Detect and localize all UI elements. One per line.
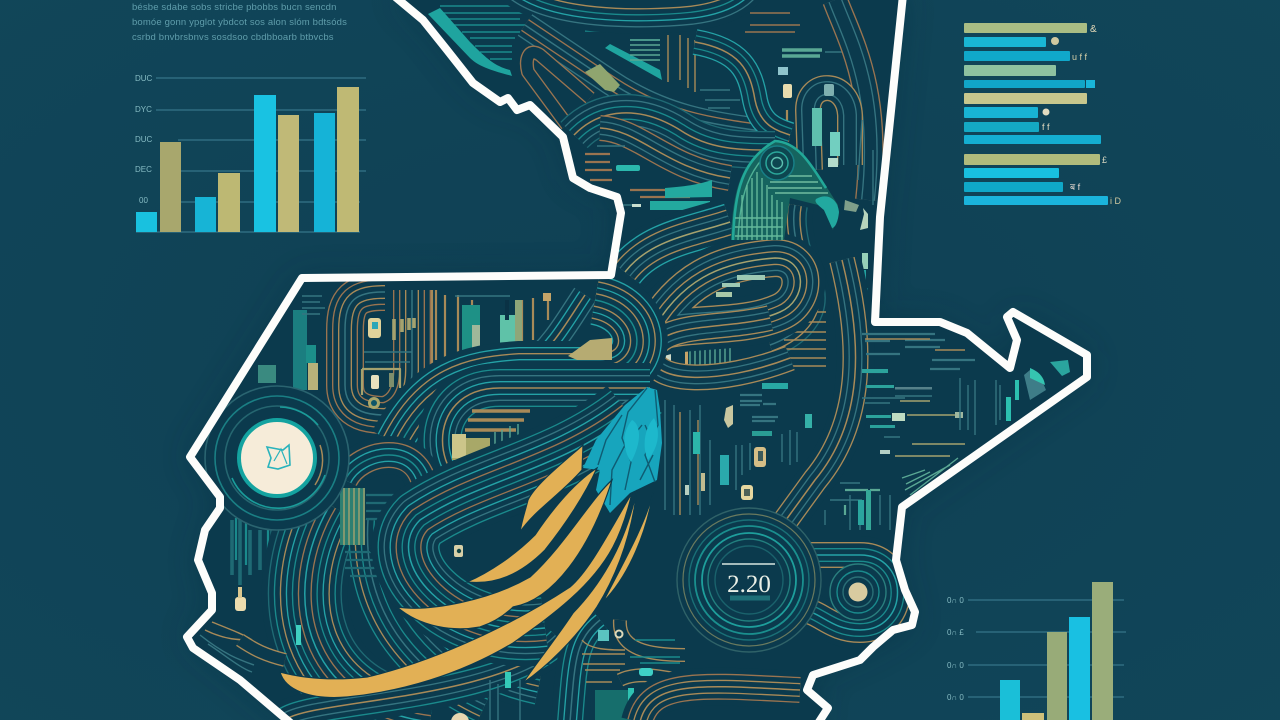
line bundle: hook: [345, 455, 426, 565]
hatch: upper centre rectangles and verticals: [668, 13, 842, 125]
line bundle: lower wave: [600, 128, 730, 178]
bar chart: top right horizontal: f f: [1042, 122, 1050, 132]
medallion: 220 dial: [677, 508, 821, 652]
line bundle: lower swirl: [296, 586, 541, 704]
bar chart: top left: DUC: [135, 74, 153, 83]
bottom beige disc: [451, 713, 469, 720]
line bundle: diagonal cyan: [536, 288, 594, 341]
bar chart: top right horizontal: £: [1102, 155, 1107, 165]
bar chart: top left: [135, 74, 366, 232]
line bundle: left sweep: [305, 505, 430, 720]
map outline: [187, 0, 1087, 720]
hatch: centre right verticals: [665, 383, 812, 515]
line bundle: U loop: [345, 290, 412, 415]
bar chart: top right horizontal: i D: [1110, 196, 1122, 206]
line bundle: bottom right curves: [640, 687, 800, 720]
bar chart: top right horizontal: &: [1090, 24, 1097, 35]
hatch: left vertical teal: [200, 518, 272, 672]
line bundle: diagonal: [525, 25, 790, 135]
hatch: centre vertical bars: [425, 290, 551, 365]
hatch: lower centre devices: [582, 620, 685, 720]
text block: intro caption: bésbe sdabe sobs stricbe pbobbs bucn sencdn: [132, 2, 337, 13]
hatch: small lines left of head: [585, 146, 712, 210]
olive box and gold lines: [452, 411, 530, 460]
hatch: green box: [340, 488, 394, 578]
line bundle: right vertical curve: [775, 260, 856, 535]
olive block: [568, 338, 612, 360]
line bundle: top arcs: [520, 0, 745, 2]
line bundle: small ring link: [800, 555, 898, 630]
line bundle: corner: [240, 640, 285, 660]
feathers: blue scales: [583, 387, 662, 513]
bar chart: top right horizontal: u f f: [1072, 52, 1088, 62]
bar chart: top left: DEC: [135, 165, 152, 174]
medallion: left ring: [205, 386, 349, 530]
line bundle: body left sweep: [625, 222, 730, 272]
hatch: mint bars inside lower wing: [666, 348, 731, 364]
small devices inside U loop: [362, 318, 414, 409]
text block: intro caption: csrbd bnvbrsbnvs sosdsoo cbdbboarb btbvcbs: [132, 32, 334, 43]
bird head: [731, 140, 839, 240]
hatch: right neck details: [844, 200, 868, 290]
hatch: vertical lines under feathers: [490, 620, 600, 720]
line bundle: hairpin: [527, 53, 620, 125]
bar chart: top left: DYC: [135, 105, 152, 114]
bar chart: bottom right: 0∩ 0: [947, 596, 964, 605]
line bundle: bottom curve: [285, 640, 560, 720]
line bundle: neck loop: [770, 205, 813, 345]
bar chart: top right horizontal: ब f: [1070, 182, 1081, 192]
line bundle: feather root swirl: [409, 415, 630, 629]
line bundle: lower U band: [442, 388, 650, 495]
map shadow: [187, 0, 1087, 720]
line bundle: upper S curve: [695, 42, 790, 135]
medallion: 220 dial: 2.20: [727, 571, 771, 598]
line bundle: wing leaf: [650, 258, 800, 335]
text block: intro caption: [132, 2, 347, 43]
bar chart: bottom right: 0∩ 0: [947, 661, 964, 670]
line bundle: oval upper right: [808, 0, 873, 205]
medallion: small beige disc: [830, 564, 886, 620]
hatch: left vertical bars: [258, 296, 325, 390]
line bundle: big S band: [400, 300, 637, 445]
map: country silhouette with line art: [200, 0, 1070, 720]
hatch: horizontal wing stripes: [784, 312, 826, 366]
bar chart: top right horizontal: [964, 23, 1122, 206]
hatch: upper left teal lines: [428, 6, 662, 80]
bar chart: top left: 00: [139, 196, 148, 205]
text block: intro caption: bomóe gonn ypglot ybdcot sos alon slóm bdtsóds: [132, 17, 347, 28]
feathers: gold plumes: [280, 445, 653, 698]
line bundle: middle sweep: [367, 520, 485, 705]
bar chart: bottom right: [947, 582, 1126, 720]
bar chart: top left: DUC: [135, 135, 153, 144]
line bundle: wave over head: [574, 113, 775, 150]
hatch: right wing details: [825, 334, 1070, 530]
line bundle: lower wing loop: [652, 318, 790, 377]
bar chart: bottom right: 0∩ £: [947, 628, 964, 637]
bar chart: bottom right: 0∩ 0: [947, 693, 964, 702]
